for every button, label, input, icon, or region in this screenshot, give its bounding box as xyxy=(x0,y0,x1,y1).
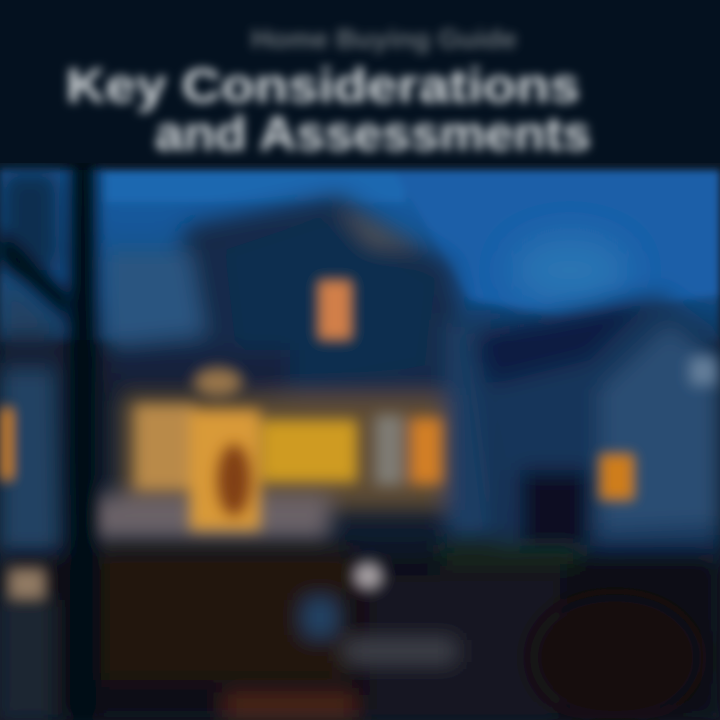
left house window xyxy=(0,408,14,480)
title line 1: Key Considerations xyxy=(66,60,580,113)
main house xyxy=(90,195,500,540)
left garden lamp xyxy=(8,568,46,600)
warm porch lights xyxy=(135,368,442,530)
right house small window xyxy=(690,357,716,385)
garden lamp xyxy=(353,562,383,590)
title line 2: and Assessments xyxy=(155,108,591,161)
header band xyxy=(0,0,720,163)
title block xyxy=(66,24,591,161)
front door xyxy=(217,444,251,516)
foreground garden xyxy=(0,545,720,720)
foreground tree trunk xyxy=(70,120,96,720)
night sky xyxy=(0,170,720,720)
left house xyxy=(0,170,60,560)
foreground silhouette xyxy=(530,595,700,720)
tree branches xyxy=(0,230,70,320)
upper window xyxy=(318,280,352,340)
sky glow xyxy=(510,235,630,305)
right house window xyxy=(600,454,634,500)
right house xyxy=(470,295,720,560)
eyebrow: Home Buying Guide xyxy=(251,24,517,54)
